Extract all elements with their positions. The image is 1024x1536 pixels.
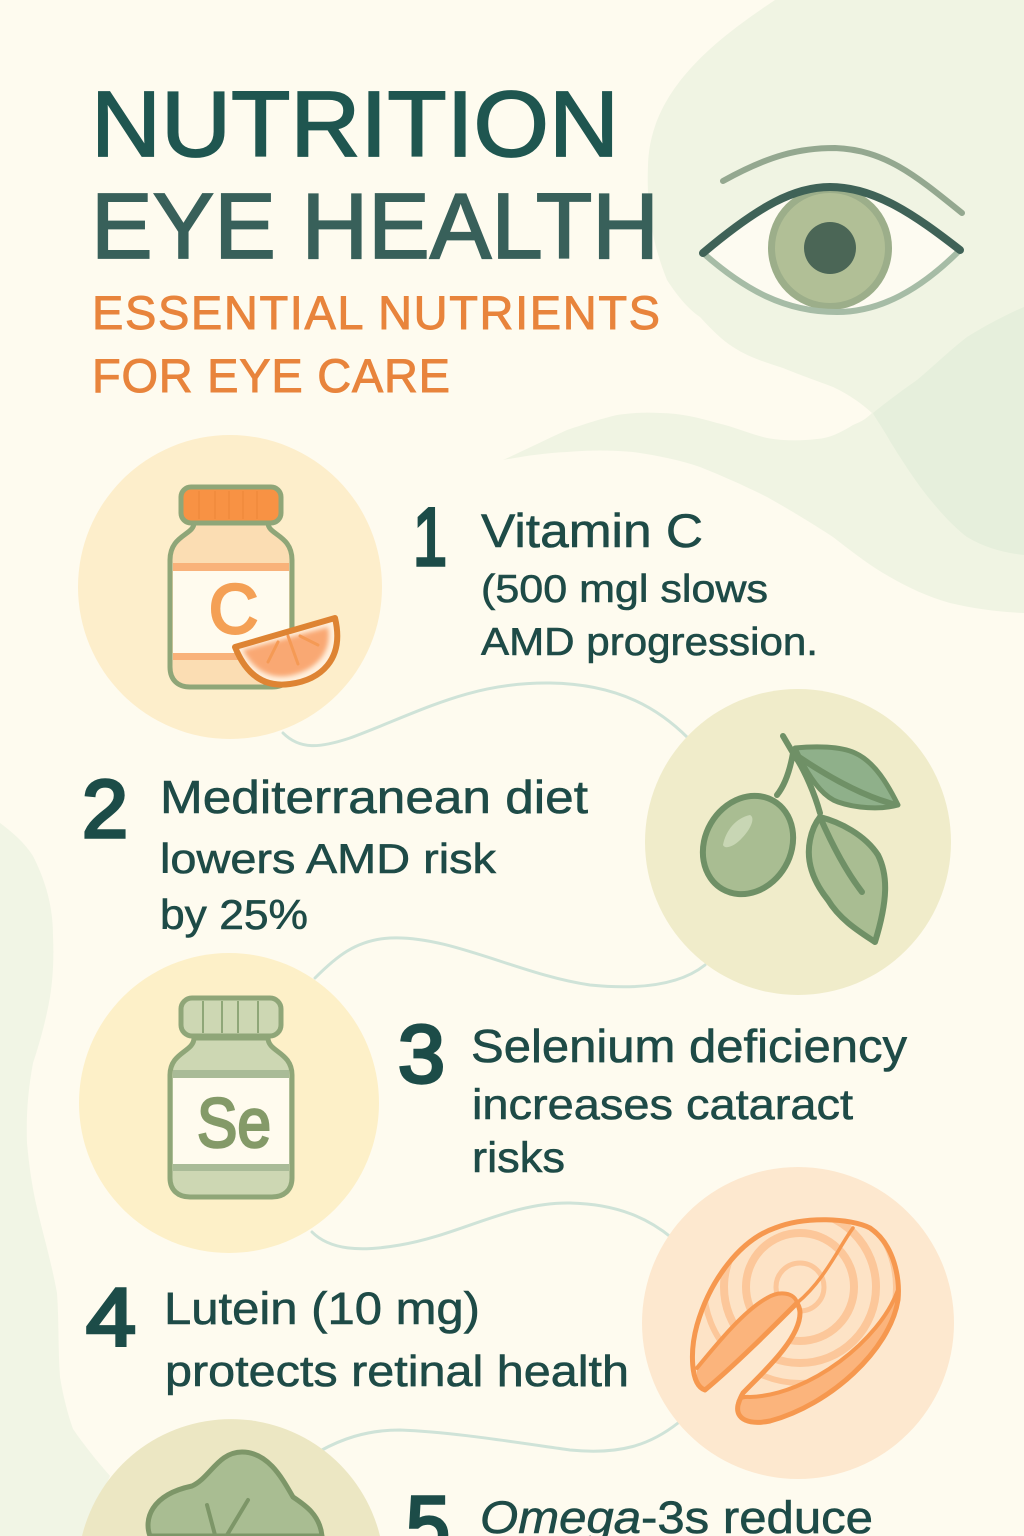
- panel: vitamin C icon: [78, 435, 382, 739]
- item 2 text: Mediterranean diet: [160, 771, 588, 823]
- icon: orange slice: [235, 618, 337, 685]
- icon: salmon steak: [692, 1191, 898, 1422]
- icon: selenium bottle: [170, 998, 292, 1197]
- item 2 text: lowers AMD risk: [160, 835, 497, 882]
- item 2 text: [82, 764, 588, 938]
- background blob: right darker: [873, 307, 1024, 555]
- connector lines: [283, 683, 705, 1451]
- item 3 text: 3: [398, 1009, 445, 1100]
- icon: olive branch: [685, 736, 898, 942]
- title: EYE HEALTH: [91, 174, 659, 278]
- item 4 text: protects retinal health: [165, 1347, 629, 1396]
- background blob: left: [0, 823, 110, 1536]
- item 5 text: [406, 1480, 873, 1536]
- item 3 text: Selenium deficiency: [471, 1020, 907, 1072]
- subtitle: FOR EYE CARE: [92, 349, 450, 402]
- item 1 text: AMD progression.: [481, 621, 818, 664]
- panel: salmon icon: [642, 1167, 954, 1479]
- title: NUTRITION: [91, 72, 619, 176]
- icon: selenium bottle: Se: [197, 1084, 271, 1162]
- item 2 text: by 25%: [160, 891, 308, 938]
- item 3 text: increases cataract: [472, 1081, 853, 1129]
- item 4 text: [86, 1272, 629, 1396]
- panel: selenium icon: [79, 953, 379, 1253]
- item 4 text: 4: [86, 1272, 136, 1363]
- item 1 text: [413, 492, 818, 664]
- item 1 text: Vitamin C: [481, 504, 703, 557]
- item 3 text: [398, 1009, 907, 1182]
- subtitle: [92, 286, 660, 402]
- subtitle: ESSENTIAL NUTRIENTS: [92, 286, 660, 339]
- icon: eye: [703, 148, 962, 312]
- icon: spinach leaf: [148, 1452, 322, 1536]
- item 2 text: 2: [82, 764, 128, 855]
- icon: vitamin C bottle: C: [209, 570, 258, 648]
- icon: vitamin C bottle: [170, 487, 292, 687]
- panel: spinach icon: [82, 1419, 380, 1536]
- item 1 text: 1: [413, 492, 447, 583]
- item 3 text: risks: [472, 1134, 565, 1182]
- background blob: top right: [503, 0, 1024, 613]
- item 4 text: Lutein (10 mg): [164, 1283, 480, 1334]
- item 1 text: (500 mgl slows: [481, 568, 768, 611]
- panel: olive icon: [645, 689, 951, 995]
- title: [91, 72, 659, 278]
